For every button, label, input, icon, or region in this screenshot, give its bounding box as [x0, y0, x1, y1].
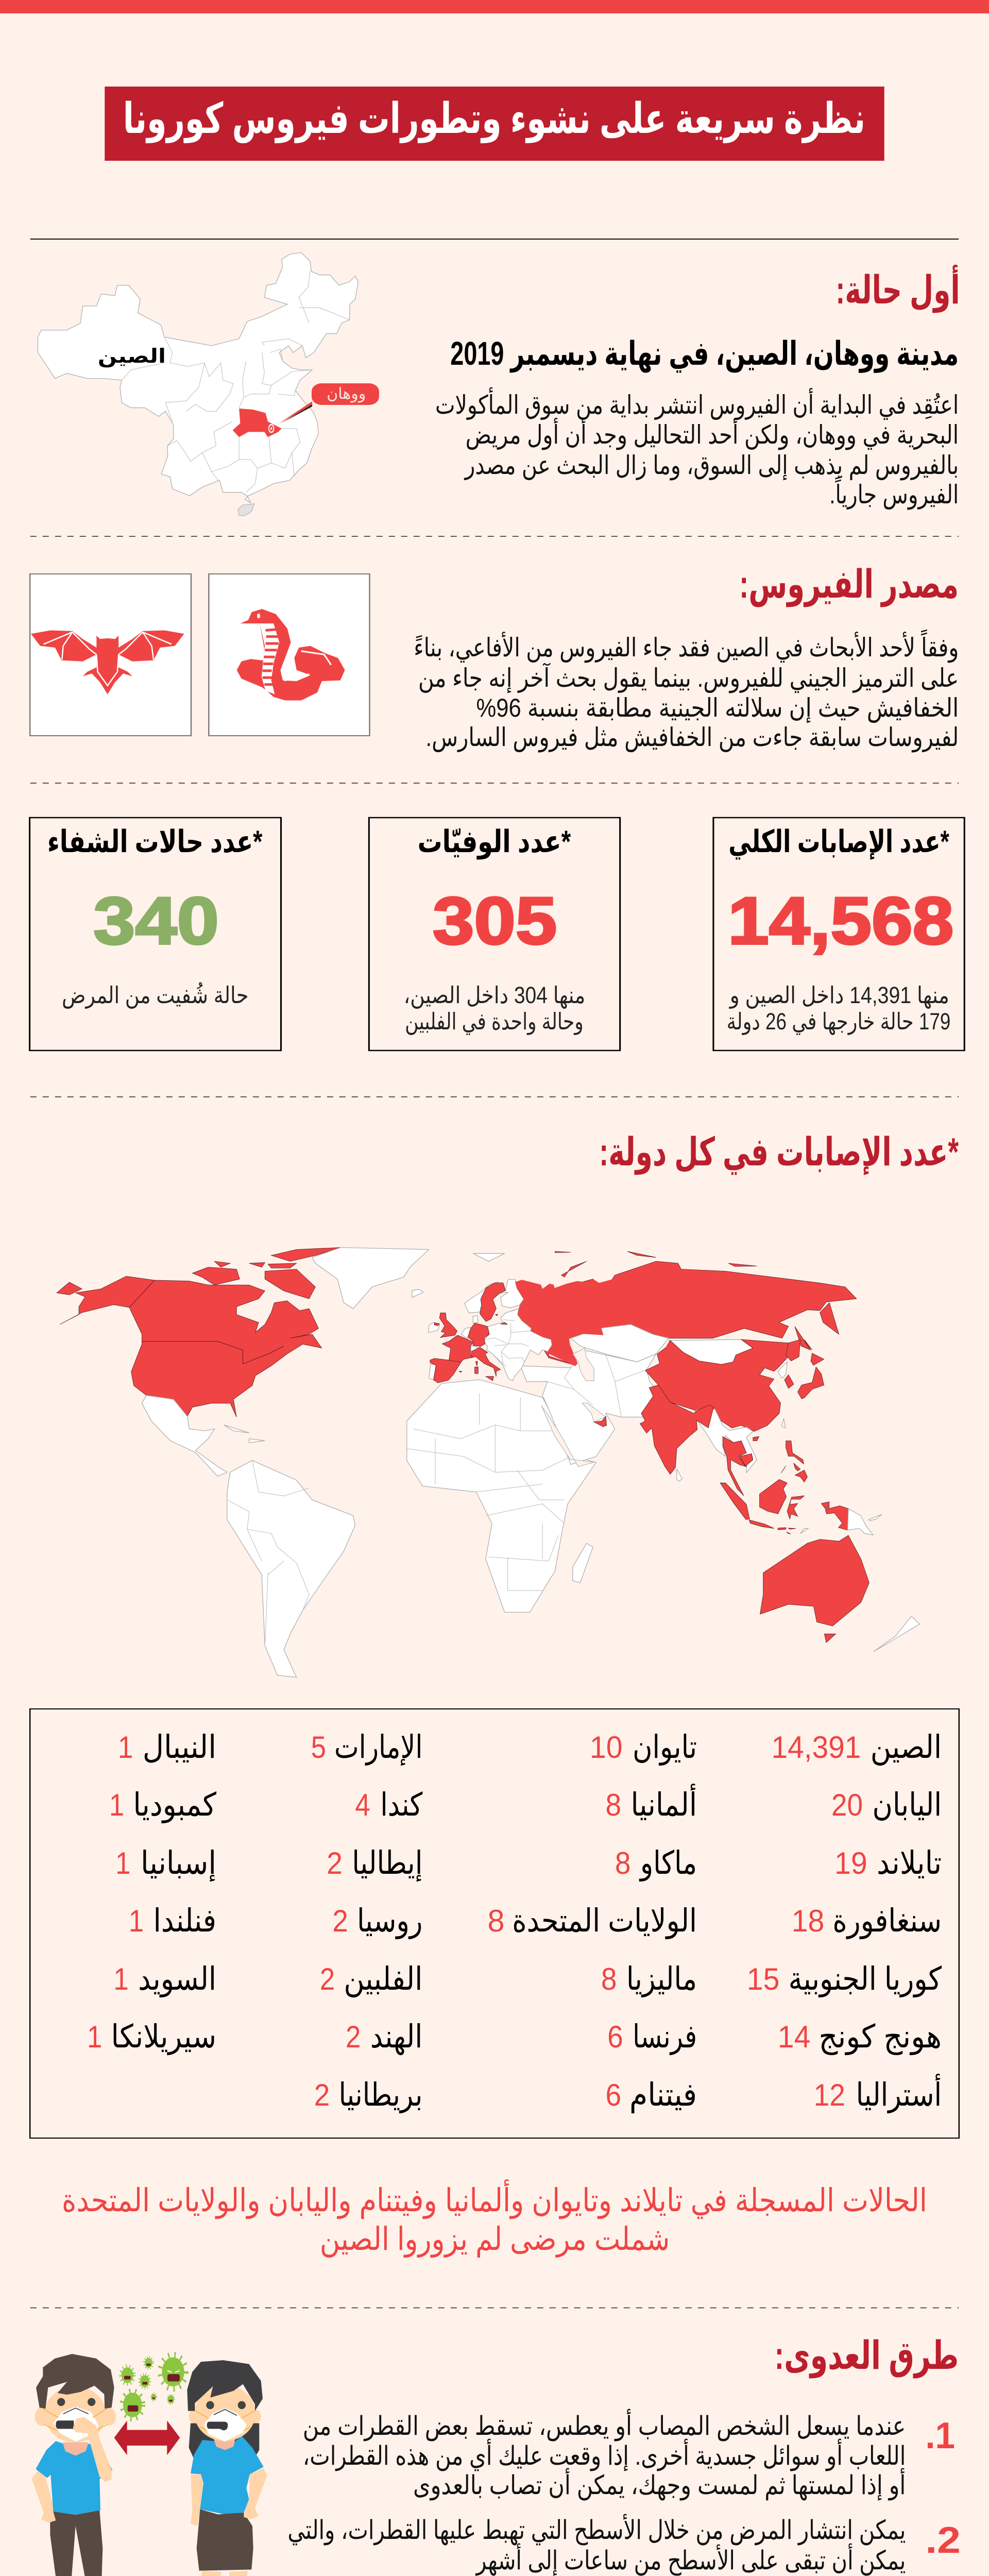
map: southeast asia — [720, 1436, 848, 1534]
stat note: recoveries: حالة شُفيت من المرض — [62, 982, 248, 1009]
world map — [57, 1247, 919, 1677]
stat note: deaths: وحالة واحدة في الفلبين — [405, 1008, 584, 1036]
table column 2: 6 — [607, 2020, 623, 2054]
table column 3: 2 — [346, 2020, 361, 2054]
wuhan pointer — [279, 401, 312, 423]
table column 4: كمبوديا — [133, 1787, 216, 1823]
callout: cases without china travel: شملت مرضى لم يزوروا الصين — [320, 2221, 670, 2258]
map: australia — [760, 1535, 869, 1642]
table column 4: النيبال — [143, 1729, 216, 1765]
table column 1: 18 — [792, 1904, 824, 1938]
table column 1 — [747, 1729, 942, 2113]
panel: transmission — [32, 2334, 961, 2576]
table column 1: الصين — [871, 1729, 942, 1766]
table column 2: ماكاو — [639, 1845, 697, 1882]
stat note: deaths — [404, 982, 585, 1036]
table column 3: 5 — [311, 1730, 326, 1765]
table column 4: 1 — [129, 1904, 144, 1938]
table column 2: تايوان — [633, 1729, 697, 1766]
table column 3: 2 — [314, 2078, 330, 2112]
list item 1 — [303, 2409, 955, 2501]
top bar — [0, 0, 989, 13]
table column 1: هونج كونج — [819, 2019, 942, 2055]
panel: total infections — [713, 818, 964, 1050]
text block: source details — [414, 629, 959, 753]
map: greenland — [312, 1247, 505, 1309]
table column 3: 2 — [332, 1904, 348, 1938]
panel: deaths — [369, 818, 620, 1050]
table column 2: 8 — [488, 1904, 505, 1938]
stat number: total infections: 14,568 — [728, 883, 953, 958]
map: japan and korea — [785, 1340, 824, 1399]
map: africa — [407, 1380, 596, 1612]
map: uae — [594, 1416, 607, 1427]
stat title: deaths: *عدد الوفيّات — [418, 824, 571, 860]
table column 4: 1 — [87, 2020, 102, 2054]
table column 2: 10 — [590, 1730, 623, 1765]
map: new zealand — [874, 1616, 919, 1652]
map: korea and indochina — [677, 1362, 787, 1481]
table column 4: 1 — [109, 1788, 124, 1822]
table column 4: 1 — [115, 1846, 130, 1880]
table column 3: إيطاليا — [352, 1845, 422, 1882]
icon: woman — [176, 2360, 267, 2576]
table column 1: 12 — [814, 2078, 845, 2112]
map: south asia — [640, 1385, 713, 1475]
stat note: deaths: منها 304 داخل الصين، — [404, 982, 585, 1009]
stat number: deaths: 305 — [433, 883, 557, 958]
panel: recoveries — [30, 818, 281, 1050]
table column 1: 14,391 — [772, 1730, 861, 1765]
table column 1: تايلاند — [877, 1845, 942, 1880]
table column 2: 8 — [601, 1962, 617, 1996]
table column 4: 1 — [113, 1962, 129, 1996]
wuhan label: ووهان — [327, 385, 366, 403]
table column 1: 14 — [778, 2020, 810, 2054]
callout: cases without china travel — [62, 2179, 927, 2258]
table column 2: فرنسا — [633, 2019, 697, 2055]
map: europe — [412, 1279, 552, 1383]
table column 3: الهند — [370, 2019, 422, 2055]
table column 3: 2 — [327, 1846, 343, 1880]
icon: man — [32, 2354, 131, 2576]
table column 1: سنغافورة — [832, 1903, 942, 1939]
table column 3: الفلبين — [344, 1961, 422, 1997]
table column 2: فيتنام — [629, 2077, 697, 2113]
icon: double arrow — [114, 2420, 180, 2455]
text block: first case details — [435, 387, 959, 510]
table column 2: ألمانيا — [630, 1783, 697, 1822]
title banner — [105, 87, 884, 161]
table column 2 — [488, 1729, 697, 2113]
list item 1: 1. — [925, 2415, 955, 2456]
stat number: recoveries: 340 — [93, 883, 219, 958]
table column 1: 20 — [831, 1788, 863, 1822]
table column 1: أستراليا — [856, 2073, 942, 2113]
stat title: recoveries: *عدد حالات الشفاء — [47, 824, 263, 859]
table column 3: بريطانيا — [339, 2077, 422, 2113]
map: central asia and middle east — [520, 1325, 669, 1464]
table column 4: 1 — [118, 1730, 133, 1765]
table column 3: الإمارات — [334, 1729, 422, 1766]
map: china — [645, 1340, 790, 1431]
map: mongolia — [669, 1340, 753, 1364]
table column 4: فنلندا — [154, 1903, 216, 1938]
stat note: total infections — [727, 982, 950, 1036]
table column 2: 8 — [606, 1788, 621, 1822]
table column 2: ماليزيا — [626, 1961, 697, 1997]
illustration: two people with viruses — [32, 2354, 267, 2576]
table column 2: 8 — [615, 1846, 630, 1880]
table column 3: كندا — [380, 1787, 422, 1822]
table column 4: السويد — [138, 1961, 216, 1997]
table column 3: روسيا — [357, 1903, 422, 1939]
table column 3: 4 — [355, 1788, 370, 1822]
table column 2: الولايات المتحدة — [512, 1903, 697, 1939]
icon: bat — [30, 574, 191, 736]
wuhan label — [312, 383, 379, 405]
map: western russia — [515, 1278, 618, 1366]
table column 4: سيريلانكا — [111, 2019, 216, 2055]
map: south america — [227, 1461, 355, 1677]
table column 2: 6 — [606, 2078, 621, 2112]
stat note: total infections: منها 14,391 داخل الصين و — [728, 982, 949, 1009]
table column 3: 2 — [320, 1962, 335, 1996]
map: central america — [142, 1395, 265, 1476]
stat note: total infections: 179 حالة خارجها في 26 دولة — [727, 1008, 950, 1036]
map: north america — [57, 1247, 340, 1417]
list item 2 — [287, 2514, 961, 2576]
panel: virus source — [30, 563, 959, 753]
china label: الصين — [98, 345, 166, 368]
icon: viruses — [121, 2355, 186, 2419]
china map — [38, 252, 379, 516]
list item 2: 2. — [925, 2520, 961, 2561]
panel: first case — [38, 252, 960, 516]
table column 1: 19 — [834, 1846, 867, 1880]
table column 1: اليابان — [872, 1787, 942, 1822]
table column 4 — [87, 1729, 216, 2055]
map: seas — [541, 1348, 606, 1467]
table column 4: إسبانيا — [141, 1845, 216, 1882]
table column 3 — [311, 1729, 422, 2113]
panel: cases table — [30, 1709, 959, 2138]
icon: snake — [209, 574, 370, 736]
table column 1: 15 — [747, 1962, 779, 1996]
map: russia — [520, 1251, 857, 1366]
